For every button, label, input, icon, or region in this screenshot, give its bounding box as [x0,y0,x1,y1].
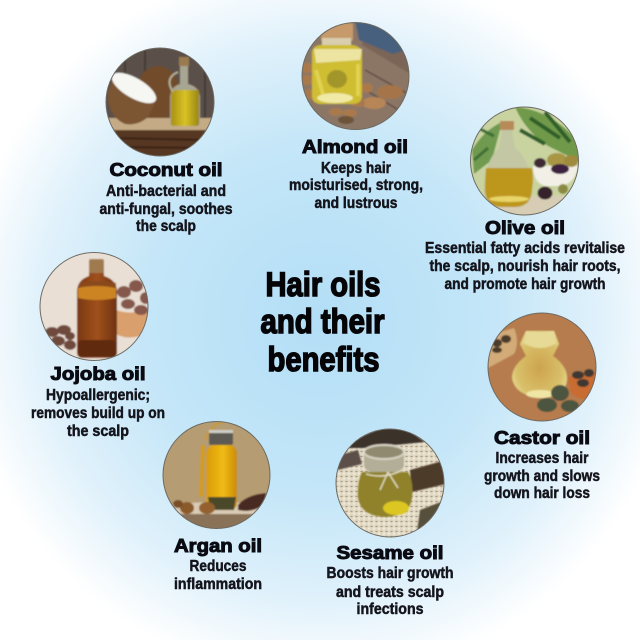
text: almond oil benefit: Keeps hair [321,160,391,177]
title: Hair oils [266,266,380,304]
panel: jojoba oil [31,251,165,440]
text: castor oil benefit: Increases hair [496,450,588,467]
heading: olive oil: Olive oil [485,217,565,238]
text: jojoba oil benefit: the scalp [67,423,129,440]
icon: argan oil bottle photo [161,419,273,531]
text: jojoba oil benefit [31,387,165,440]
text: almond oil benefit [289,160,423,212]
heading: jojoba oil: Jojoba oil [50,363,146,384]
text: castor oil benefit: down hair loss [494,485,590,502]
icon: coconut and oil bottle photo [105,47,215,157]
icon: sesame oil jar photo [334,427,446,539]
panel: argan oil [161,419,273,593]
text: castor oil benefit: growth and slows [484,468,600,485]
text: sesame oil benefit: and treats scalp [336,584,444,601]
text: sesame oil benefit [326,565,454,618]
text: sesame oil benefit: Boosts hair growth [326,565,454,582]
panel: castor oil [484,311,600,502]
title: benefits [268,341,380,379]
text: argan oil benefit [174,558,262,593]
text: almond oil benefit: and lustrous [314,195,398,212]
heading: coconut oil: Coconut oil [110,159,222,180]
text: olive oil benefit: and promote hair growth [444,276,606,293]
text: coconut oil benefit: anti-fungal, soothes [100,201,233,218]
panel: olive oil [425,106,625,293]
text: jojoba oil benefit: Hypoallergenic; [46,387,150,404]
text: olive oil benefit [425,240,625,293]
title: and their [260,303,384,341]
panel: coconut oil [100,47,233,235]
heading: sesame oil: Sesame oil [336,542,444,563]
title [260,266,384,379]
panel: almond oil [289,20,423,212]
text: argan oil benefit: inflammation [174,576,262,593]
icon: jojoba oil bottle photo [38,251,152,363]
icon: almond oil jar photo [300,20,412,132]
text: jojoba oil benefit: removes build up on [31,405,165,422]
panel: sesame oil [326,427,454,618]
text: coconut oil benefit [100,183,233,235]
icon: castor oil bottle photo [486,311,598,423]
heading: castor oil: Castor oil [494,427,590,448]
heading: argan oil: Argan oil [174,535,262,556]
text: coconut oil benefit: Anti-bacterial and [106,183,226,200]
icon: olive oil bottle photo [470,106,580,216]
text: coconut oil benefit: the scalp [136,218,196,235]
text: sesame oil benefit: infections [356,601,424,618]
text: almond oil benefit: moisturised, strong, [289,177,423,194]
text: argan oil benefit: Reduces [190,558,247,575]
heading: almond oil: Almond oil [302,136,408,157]
text: castor oil benefit [484,450,600,502]
